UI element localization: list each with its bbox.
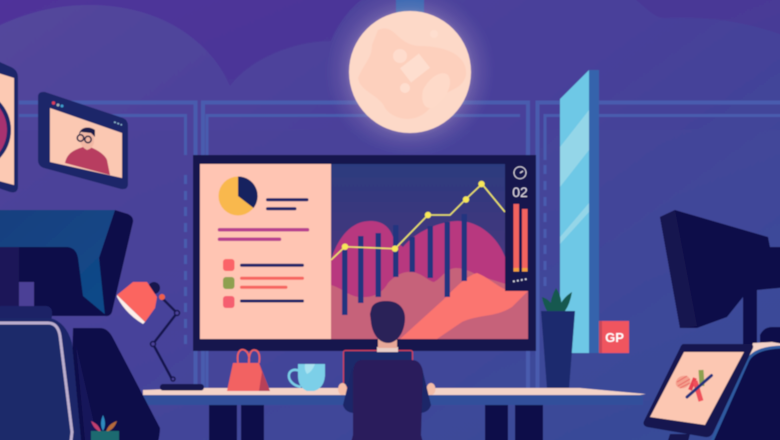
left background monitor <box>0 210 133 316</box>
collar <box>377 347 398 352</box>
text lines <box>220 200 308 301</box>
wall video call tablet <box>38 92 128 189</box>
chair back <box>349 360 425 440</box>
wall panel mouldings <box>19 102 780 390</box>
trend line <box>331 181 505 260</box>
person from behind <box>338 301 436 440</box>
caller portrait <box>65 128 110 175</box>
GP badge <box>599 321 629 353</box>
gauge bars <box>514 204 528 272</box>
bars <box>342 214 467 315</box>
indicator dots <box>513 279 527 282</box>
neck <box>378 336 397 348</box>
left wall tablet <box>0 60 18 192</box>
desk <box>143 388 646 440</box>
window <box>560 70 599 353</box>
left chair <box>0 306 160 440</box>
large wall monitor <box>193 155 536 351</box>
right background monitor <box>660 210 780 350</box>
coffee cup <box>289 364 325 391</box>
drawing tablet <box>643 344 753 440</box>
value: 02 <box>512 184 528 200</box>
area and line chart <box>331 164 528 339</box>
window dots <box>52 101 122 125</box>
right chair arm <box>708 342 780 440</box>
report panel <box>200 164 331 339</box>
laptop <box>344 350 412 388</box>
sketch marks <box>674 370 712 401</box>
ceiling moon lamp <box>324 0 496 158</box>
list bullets <box>223 259 234 308</box>
shopping bag <box>227 350 270 391</box>
potted plant on desk <box>541 288 575 389</box>
pie chart <box>218 176 258 216</box>
hands <box>338 383 436 395</box>
desk lamp <box>117 282 204 390</box>
head <box>370 301 405 343</box>
side gauge panel <box>505 155 536 351</box>
dial icon <box>514 167 526 179</box>
GP badge: GP <box>605 330 624 345</box>
small floor plant <box>91 415 119 440</box>
arms <box>343 368 431 413</box>
